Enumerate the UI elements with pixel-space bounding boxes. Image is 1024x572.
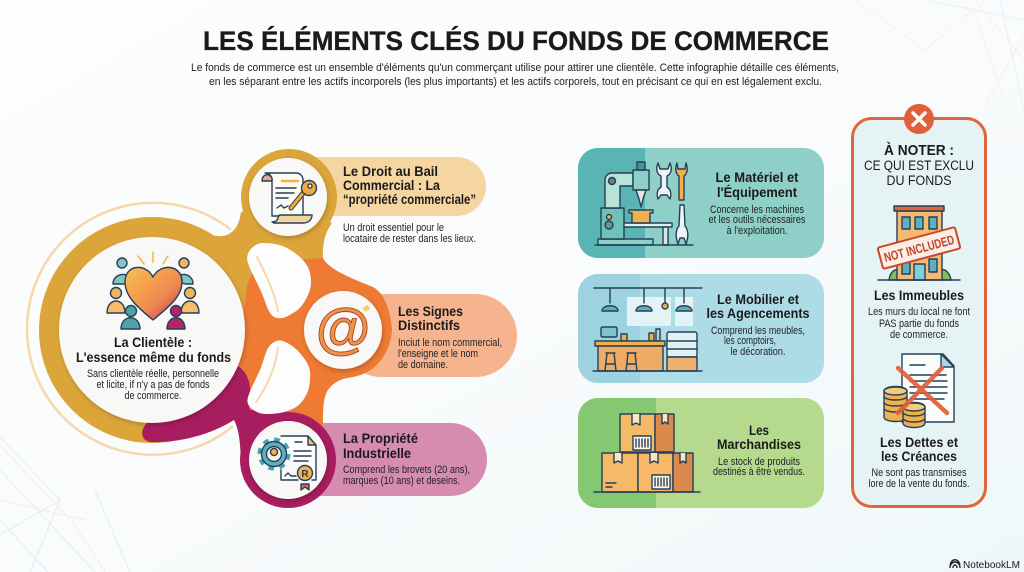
icon: building with stamp: [878, 206, 960, 280]
connector: orange disc: [295, 282, 391, 378]
connector: gold ring: [39, 149, 337, 443]
text: dettes et creances: les Créances: [881, 448, 957, 464]
text: la clientele: de commerce.: [124, 390, 182, 402]
text: mobilier: Le Mobilier et: [717, 291, 799, 307]
text: materiel: et les outils nécessaires: [708, 214, 806, 226]
heading: a noter: DU FONDS: [886, 173, 952, 188]
text: propriete industrielle: La Propriété: [343, 430, 418, 446]
text: signes distinctifs: Les Signes: [398, 303, 463, 319]
item: propriete industrielle: [249, 421, 327, 499]
text: droit au bail: Le Droit au Bail: [343, 163, 438, 179]
notebooklm logo: NotebookLM: [963, 559, 1020, 571]
heading: a noter: CE QUI EST EXCLU: [864, 158, 974, 173]
icon: spark: [362, 305, 370, 312]
text: materiel: Le Matériel et: [716, 169, 799, 185]
icon: machine and tools: [595, 162, 693, 245]
text: marchandises: Marchandises: [717, 436, 801, 452]
connector: magenta: [142, 365, 336, 508]
text: mobilier: [706, 291, 810, 358]
text: propriete industrielle: Industrielle: [343, 445, 411, 461]
icon: cardboard boxes: [594, 414, 700, 492]
text: les immeubles: de commerce.: [890, 329, 948, 341]
pill: droit au bail background: [270, 157, 486, 216]
text: la clientele: L'essence même du fonds: [76, 349, 231, 365]
text: droit au bail: Un droit essentiel pour le: [343, 222, 444, 234]
text: droit au bail: [343, 163, 476, 245]
icon: crossed document and coins: [884, 354, 954, 428]
pill: propriete industrielle background: [270, 423, 487, 496]
central circle: la clientele: [59, 237, 245, 423]
gap shape lower: [247, 340, 310, 414]
icon: at sign: @: [316, 296, 370, 359]
heading: a noter: À NOTER :: [884, 142, 954, 159]
icon: heart and people: [107, 252, 199, 329]
text: mobilier: les comptoirs,: [724, 335, 776, 347]
text: dettes et creances: lore de la vente du fonds.: [868, 478, 970, 490]
text: la clientele: Sans clientèle réelle, personnelle: [87, 368, 219, 380]
text: droit au bail: Commercial : La: [343, 177, 440, 193]
text: propriete industrielle: Comprend les brovets (20 ans),: [343, 464, 470, 476]
text: materiel: Concerne les machines: [710, 204, 804, 216]
text: marchandises: Les: [749, 422, 769, 438]
icon: scroll and key: [262, 173, 316, 223]
text: marchandises: destinés à être vendus.: [713, 466, 805, 478]
pill: signes distinctifs background: [340, 294, 517, 377]
text: dettes et creances: Les Dettes et: [880, 434, 958, 450]
text: les immeubles: Les murs du local ne font: [868, 306, 970, 318]
text: droit au bail: “propriété commerciale”: [343, 191, 476, 207]
connector: orange: [237, 258, 392, 425]
icon: registered mark: R: [301, 469, 309, 480]
icon: shop interior: [593, 288, 702, 371]
panel: mobilier et agencements: [578, 274, 824, 383]
item: droit au bail: [249, 158, 327, 236]
text: marchandises: Le stock de produits: [718, 456, 800, 468]
text: signes distinctifs: de domaine.: [398, 359, 448, 371]
text: la clientele: La Clientèle :: [114, 334, 192, 350]
intro text: Le fonds de commerce est un ensemble d'éléments qu'un commerçant utilise pour attirer une clientèle. Cette infographie détaille ces éléments,: [191, 62, 839, 74]
heading: a noter: [864, 142, 974, 188]
gap shape upper: [247, 243, 311, 318]
text: la clientele: et licite, if n'y a pas de fonds: [96, 379, 210, 391]
text: les immeubles: Les Immeubles: [874, 287, 964, 303]
text: dettes et creances: [868, 434, 970, 490]
text: signes distinctifs: Distinctifs: [398, 317, 460, 333]
text: signes distinctifs: l'enseigne et le nom: [398, 348, 478, 360]
text: signes distinctifs: [398, 303, 502, 371]
intro text: en les séparant entre les actifs incorporels (les plus importants) et les actifs corporels, tout en précisant ce qui en est légalement exclu.: [209, 76, 822, 88]
icon: building with stamp: NOT INCLUDED: [882, 232, 956, 265]
item: signes distinctifs: [304, 291, 382, 369]
text: propriete industrielle: [343, 430, 470, 487]
text: mobilier: les Agencements: [706, 305, 810, 321]
title: LES ÉLÉMENTS CLÉS DU FONDS DE COMMERCE: [203, 25, 829, 56]
text: materiel: à l'exploitation.: [726, 225, 788, 237]
text: les immeubles: [868, 287, 970, 341]
text: mobilier: Comprend les meubles,: [711, 325, 805, 337]
text: dettes et creances: Ne sont pas transmises: [872, 467, 967, 479]
icon: gear and certificate: [260, 436, 316, 490]
text: signes distinctifs: Inciut le nom commercial,: [398, 337, 502, 349]
text: mobilier: le décoration.: [730, 346, 786, 358]
diagram: actifs incorporels: [27, 149, 517, 508]
panel: marchandises: [578, 398, 824, 508]
text: la clientele: [76, 334, 231, 402]
text: materiel: [708, 169, 806, 237]
panel: a noter, exclusions: [852, 104, 986, 506]
text: marchandises: [713, 422, 805, 478]
text: materiel: l'Équipement: [717, 184, 797, 200]
icon: cross badge: [904, 104, 934, 134]
text: propriete industrielle: marques (10 ans) et deseins.: [343, 475, 460, 487]
text: les immeubles: PAS partie du fonds: [879, 318, 959, 330]
intro text: [191, 62, 839, 88]
panel: materiel et equipement: [578, 148, 824, 258]
text: droit au bail: locataire de rester dans les lieux.: [343, 233, 476, 245]
thin outer ring: [27, 203, 232, 455]
